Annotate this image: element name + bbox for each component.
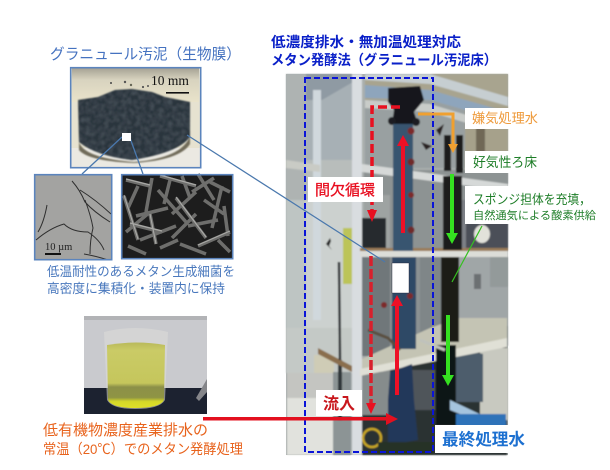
post [352,74,362,455]
leader line: jar to plant [187,135,385,262]
green sleeve [343,228,352,284]
left lower equipment [286,328,352,373]
caption: wastewater treatment: 低有機物濃度産業排水の [43,422,208,439]
reactor boundary: dashed outline [305,78,433,452]
photo: granular sludge jar [70,67,201,168]
mid section [364,170,508,250]
label: anaerobic effluent: 嫌気処理水 [472,111,538,126]
label: sponge carrier note: 自然通気による酸素供給 [473,208,596,222]
heading: process title [271,34,497,68]
caption: wastewater treatment [43,422,243,457]
black rack [444,135,451,171]
micrograph: SEM rods [121,174,233,259]
label: intermittent circulation: 間欠循環 [315,182,375,199]
leader line: sponge carrier [452,226,482,282]
label: anaerobic effluent [465,108,545,129]
left wall [286,74,306,324]
arrow: intermittent recirculation [366,107,400,414]
label: sponge carrier note: スポンジ担体を充填， [473,192,591,207]
callout: magnified section box [392,263,409,293]
label: inflow [316,390,362,416]
caption: methanogen retention [47,264,235,296]
arrow: inflow [203,413,398,425]
label: final effluent: 最終処理水 [442,430,526,449]
photo: pilot plant [286,74,508,455]
arrow: anaerobic effluent [418,114,458,153]
heading: process title: メタン発酵法（グラニュール汚泥床） [271,52,497,68]
label: aerobic filter [465,151,537,173]
caption: wastewater treatment: 常温（20℃）でのメタン発酵処理 [43,441,243,457]
heading: granular sludge: グラニュール汚泥（生物膜） [50,46,241,63]
arrow: aerobic filter upper [446,174,458,244]
label: final effluent [435,425,526,453]
label: inflow: 流入 [323,395,355,413]
shelves [362,164,508,191]
table surface [360,318,507,370]
label: intermittent circulation [308,177,383,202]
below shelf [360,345,507,455]
marker: sampled region with leader lines [82,133,143,174]
blue column [393,124,413,251]
arrow: upflow in column [391,135,409,395]
black head [388,86,424,124]
label: sponge carrier note [465,186,597,224]
scale label: 10 µm: 10 µm [45,242,72,253]
blue tray [450,400,500,426]
heading: process title: 低濃度排水・無加温処理対応 [271,34,461,50]
upper middle [365,74,508,108]
arrow: aerobic filter lower [442,315,454,386]
caption: methanogen retention: 低温耐性のあるメタン生成細菌を [47,264,235,279]
micrograph: filamentous cells [34,174,112,260]
caption: methanogen retention: 高密度に集積化・装置内に保持 [47,281,225,296]
lower section behind shelf [360,256,508,346]
photo: beaker of wastewater [84,316,207,414]
label: aerobic filter: 好気性ろ床 [473,155,537,170]
scale label: 10 mm: 10 mm [151,73,189,88]
